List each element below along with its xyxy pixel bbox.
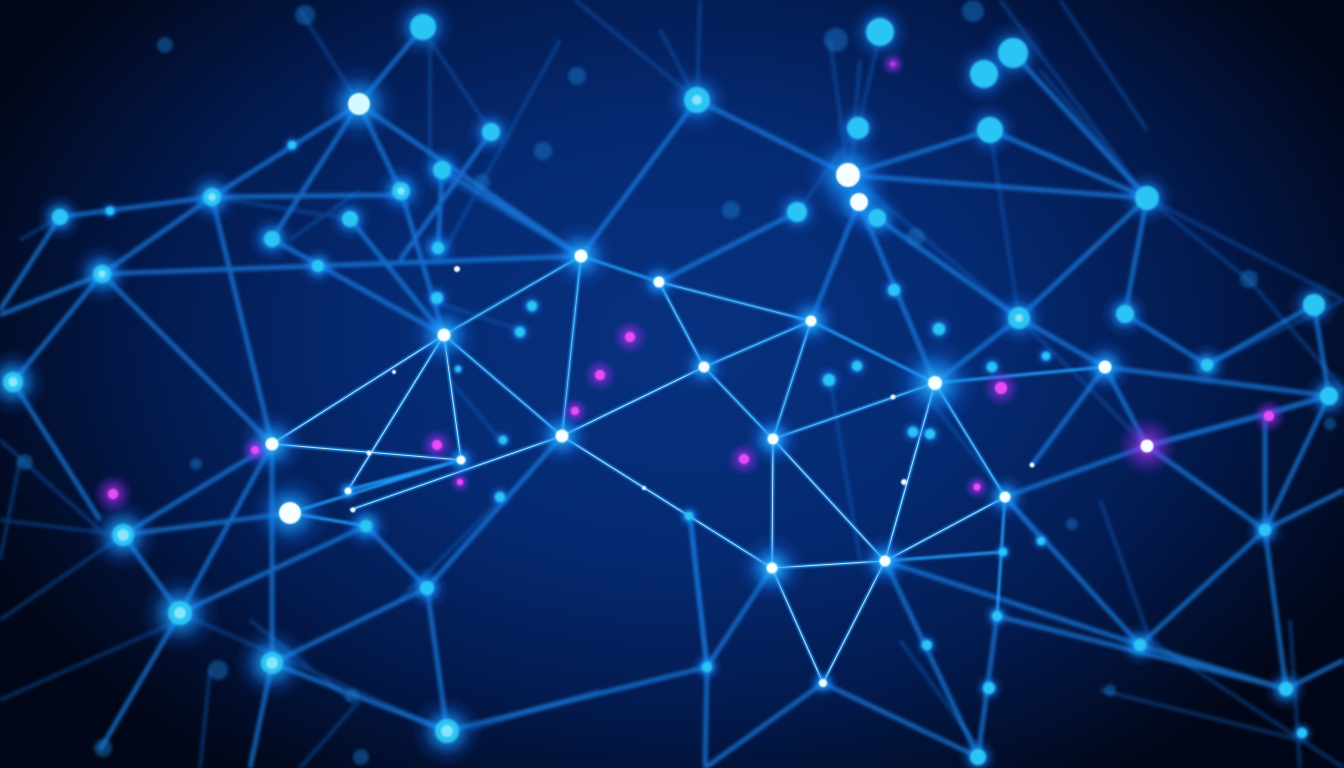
- bright edges: [272, 256, 1105, 683]
- white edge highlights: [272, 335, 1005, 683]
- white node centers: [266, 93, 1154, 687]
- purple node glows: [93, 52, 1286, 514]
- bright inner highlights of cyan nodes: [8, 95, 1023, 737]
- purple node centers: [108, 332, 1274, 499]
